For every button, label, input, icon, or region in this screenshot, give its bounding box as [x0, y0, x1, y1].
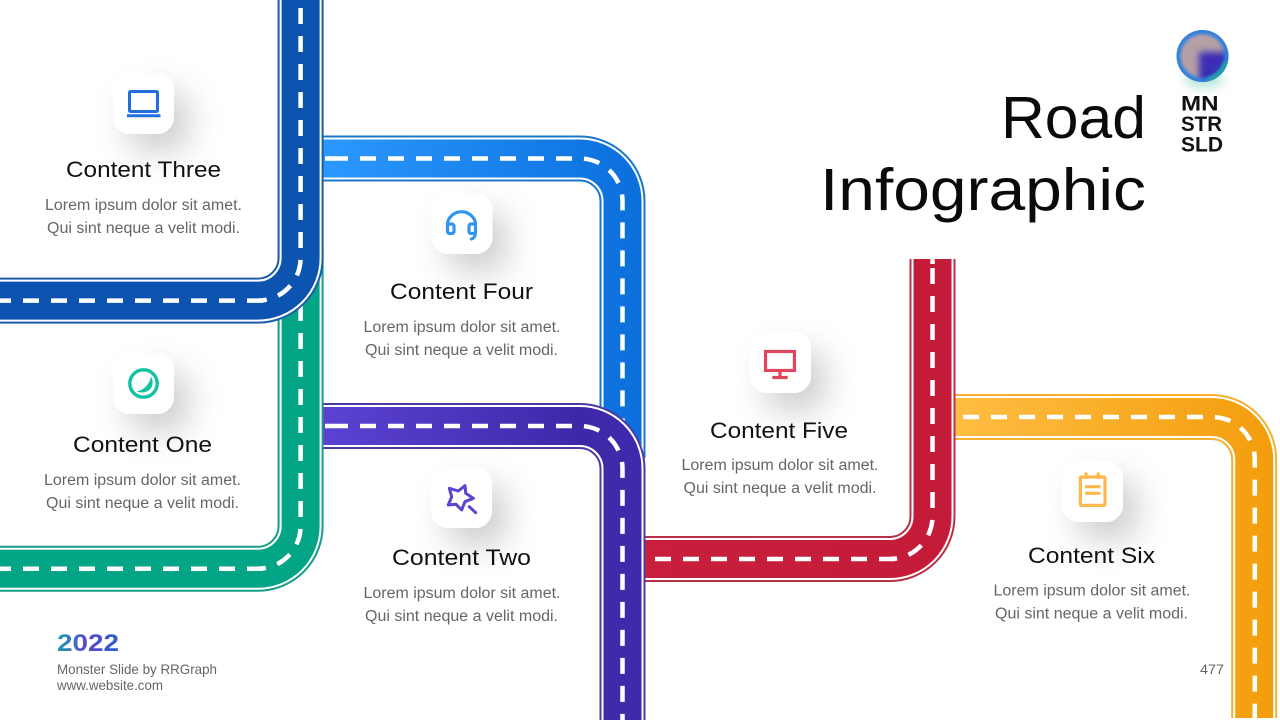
title: Infographic — [820, 157, 1146, 223]
text block — [44, 472, 241, 512]
panel: Content Five — [682, 332, 878, 497]
logo: wordmark: STR — [1181, 112, 1222, 136]
icon tile — [750, 332, 811, 393]
text block: Qui sint neque a velit modi. — [365, 342, 558, 359]
icon: laptop — [127, 92, 160, 116]
text block: Lorem ipsum dolor sit amet. — [45, 197, 242, 214]
text block — [682, 457, 878, 497]
heading: Content Four — [390, 279, 533, 304]
logo: wordmark: MN — [1181, 92, 1218, 116]
text block: Qui sint neque a velit modi. — [995, 606, 1188, 622]
footer credit: Monster Slide by RRGraph — [57, 661, 217, 677]
page number: 477 — [1200, 661, 1224, 677]
heading: Content Two — [392, 545, 531, 570]
road: yellow — [950, 417, 1255, 718]
road: green — [0, 250, 301, 569]
icon: monitor — [766, 352, 794, 378]
text block: Lorem ipsum dolor sit amet. — [994, 582, 1190, 600]
title: Road — [1001, 85, 1146, 151]
text block: Lorem ipsum dolor sit amet. — [364, 585, 560, 602]
panel: Content Four — [364, 193, 560, 359]
heading: Content Five — [710, 418, 848, 443]
road: light blue — [322, 158, 622, 458]
logo: sphere — [1176, 30, 1231, 88]
heading: Content Six — [1028, 543, 1155, 568]
icon tile — [113, 353, 174, 414]
heading: Content Three — [66, 157, 221, 182]
text block: Qui sint neque a velit modi. — [47, 220, 240, 237]
logo: wordmark — [1181, 92, 1223, 156]
icon tile — [113, 73, 174, 134]
text block: Lorem ipsum dolor sit amet. — [44, 472, 241, 489]
footer credit: www.website.com — [56, 677, 163, 693]
text block: Qui sint neque a velit modi. — [365, 608, 558, 625]
icon tile — [432, 193, 492, 254]
heading: Content One — [73, 432, 212, 457]
panel: Content One — [44, 353, 241, 512]
text block: Lorem ipsum dolor sit amet. — [364, 319, 560, 336]
text block: Qui sint neque a velit modi. — [684, 480, 876, 497]
icon: magic star — [448, 486, 476, 513]
panel: Content Six — [994, 461, 1190, 622]
year: 2022 — [57, 630, 119, 657]
text block: Qui sint neque a velit modi. — [46, 495, 239, 512]
icon: moon circle — [130, 370, 157, 397]
text block — [45, 197, 242, 237]
road: red — [640, 259, 932, 559]
icon tile — [1062, 461, 1123, 522]
icon: notepad — [1080, 472, 1105, 505]
footer credit — [56, 661, 217, 693]
text block — [994, 582, 1190, 622]
logo: wordmark: SLD — [1181, 132, 1223, 156]
road: purple — [322, 426, 622, 720]
road: dark blue — [0, 0, 301, 301]
text block: Lorem ipsum dolor sit amet. — [682, 457, 878, 474]
title — [820, 85, 1146, 223]
text block — [364, 319, 560, 359]
panel: Content Two — [364, 467, 560, 625]
icon tile — [431, 467, 492, 528]
text block — [364, 585, 560, 625]
panel: Content Three — [45, 73, 242, 237]
icon: headset — [448, 212, 476, 239]
